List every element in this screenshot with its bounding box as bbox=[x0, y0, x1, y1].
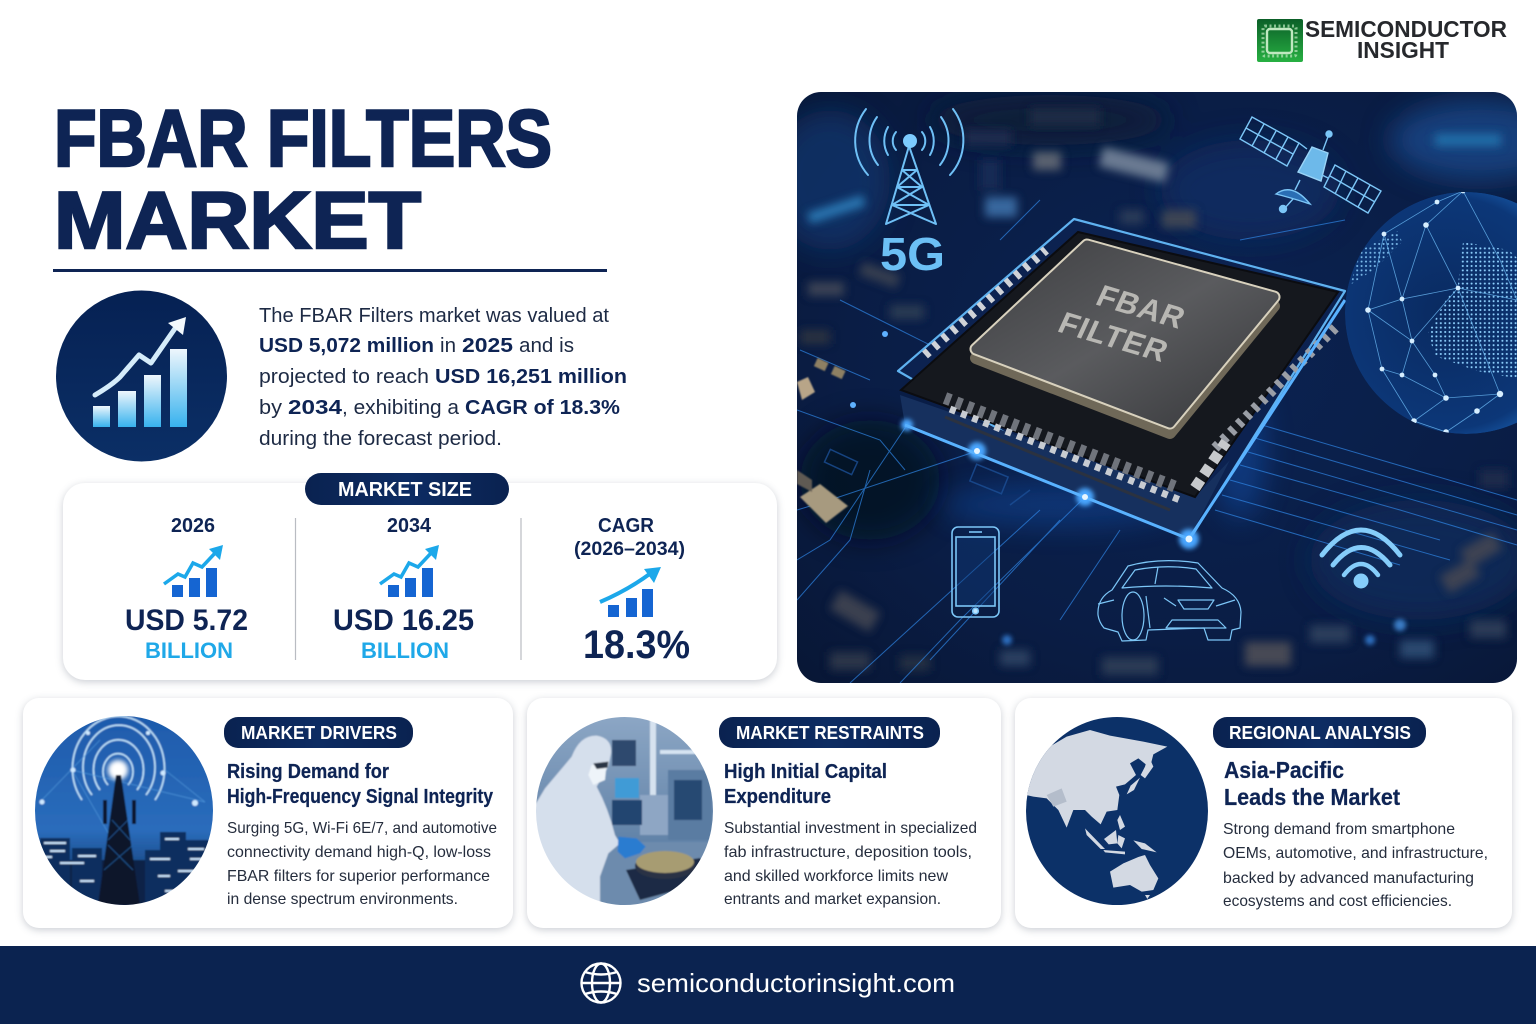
market summary paragraph: by bbox=[259, 397, 282, 419]
5G label: 5G bbox=[880, 228, 945, 280]
heading: Asia-Pacific bbox=[1224, 757, 1344, 783]
website: semiconductorinsight.com bbox=[637, 968, 955, 998]
stat: CAGR: (2026–2034) bbox=[574, 539, 685, 560]
market summary paragraph: USD 5,072 million bbox=[259, 335, 434, 357]
chip package bbox=[898, 219, 1345, 539]
stat: CAGR: 18.3% bbox=[583, 623, 690, 667]
description: backed by advanced manufacturing bbox=[1223, 870, 1474, 887]
glow: circuit board bbox=[797, 200, 1517, 683]
heading bbox=[1224, 757, 1400, 810]
title: FBAR FILTERS bbox=[54, 94, 552, 184]
market summary paragraph: 2025 bbox=[462, 335, 513, 357]
market summary paragraph: in bbox=[440, 335, 456, 357]
market summary paragraph: , exhibiting a bbox=[342, 397, 460, 419]
label pill: MARKET DRIVERS bbox=[241, 723, 397, 743]
description bbox=[227, 820, 497, 908]
label pill bbox=[719, 717, 940, 748]
description: FBAR filters for superior performance bbox=[227, 868, 490, 885]
description: Surging 5G, Wi-Fi 6E/7, and automotive bbox=[227, 820, 497, 837]
icon: globe network bbox=[1345, 192, 1517, 434]
panel: regional analysis bbox=[1015, 698, 1512, 928]
logo wordmark: SEMICONDUCTOR bbox=[1305, 16, 1507, 42]
stat: CAGR bbox=[574, 515, 690, 667]
map: Asia-Pacific globe bbox=[1026, 717, 1208, 905]
market summary paragraph bbox=[259, 305, 627, 450]
logo wordmark: INSIGHT bbox=[1357, 37, 1449, 63]
stat: 2034 bbox=[333, 515, 474, 663]
description: and skilled workforce limits new bbox=[724, 868, 948, 885]
title: MARKET bbox=[54, 176, 421, 266]
market summary paragraph: The FBAR Filters market was valued at bbox=[259, 305, 609, 327]
heading: High-Frequency Signal Integrity bbox=[227, 786, 494, 808]
panel: market drivers bbox=[23, 698, 513, 928]
label pill bbox=[1213, 717, 1426, 748]
icon: web globe bbox=[582, 964, 620, 1002]
description: ecosystems and cost efficiencies. bbox=[1223, 893, 1452, 910]
icon: car outline bbox=[1098, 561, 1241, 641]
icon: phone bbox=[952, 527, 999, 617]
description: OEMs, automotive, and infrastructure, bbox=[1223, 845, 1488, 862]
market summary paragraph: during the forecast period. bbox=[259, 428, 502, 450]
market size pill: MARKET SIZE bbox=[338, 479, 472, 501]
panel: hero chip illustration bbox=[770, 92, 1536, 683]
chip label bbox=[1058, 285, 1184, 362]
description: Strong demand from smartphone bbox=[1223, 821, 1455, 838]
heading: Rising Demand for bbox=[227, 761, 389, 783]
market summary paragraph: and is bbox=[519, 335, 574, 357]
icon: 5G tower bbox=[855, 109, 963, 280]
stat: 2034: BILLION bbox=[361, 638, 449, 663]
logo: Semiconductor Insight bbox=[1257, 16, 1507, 63]
chip lid with label bbox=[976, 245, 1274, 433]
market summary paragraph: 2034 bbox=[288, 397, 343, 419]
heading bbox=[724, 761, 887, 808]
stat: 2026: BILLION bbox=[145, 638, 233, 663]
icon: satellite bbox=[1240, 117, 1381, 213]
description bbox=[724, 820, 977, 908]
market summary paragraph: projected to reach bbox=[259, 366, 429, 388]
heading: Leads the Market bbox=[1224, 784, 1400, 810]
image: 5G tower over city bbox=[35, 716, 213, 905]
market summary paragraph: USD 16,251 million bbox=[435, 366, 627, 388]
panel: market size bbox=[63, 473, 777, 680]
title underline bbox=[53, 269, 607, 272]
icon: wifi bbox=[1322, 530, 1400, 588]
stat: CAGR: CAGR bbox=[598, 515, 655, 537]
description: fab infrastructure, deposition tools, bbox=[724, 844, 972, 861]
heading: High Initial Capital bbox=[724, 761, 887, 783]
component: gold capacitors bbox=[797, 358, 848, 523]
description: Substantial investment in specialized bbox=[724, 820, 977, 837]
chip label: FBAR bbox=[1091, 278, 1191, 336]
icon: green chip bbox=[1257, 19, 1303, 62]
heading bbox=[227, 761, 494, 808]
label pill: REGIONAL ANALYSIS bbox=[1229, 723, 1411, 743]
description: entrants and market expansion. bbox=[724, 891, 941, 908]
description: connectivity demand high-Q, low-loss bbox=[227, 844, 491, 861]
glow nodes bbox=[850, 300, 1406, 645]
stat: 2026: 2026 bbox=[171, 515, 215, 537]
title bbox=[54, 94, 552, 266]
label pill: MARKET RESTRAINTS bbox=[736, 723, 924, 743]
description bbox=[1223, 821, 1488, 910]
market summary paragraph: CAGR of 18.3% bbox=[465, 397, 620, 419]
description: in dense spectrum environments. bbox=[227, 891, 458, 908]
stat: 2026 bbox=[125, 515, 248, 663]
stat: 2026: USD 5.72 bbox=[125, 604, 248, 637]
heading: Expenditure bbox=[724, 786, 831, 808]
panel: market restraints bbox=[527, 698, 1001, 928]
label pill bbox=[224, 717, 413, 748]
stat: 2034: 2034 bbox=[387, 515, 432, 537]
stat: 2034: USD 16.25 bbox=[333, 604, 474, 637]
icon: growth chart circle bbox=[56, 290, 227, 462]
image: cleanroom technician bbox=[536, 717, 713, 905]
footer bar bbox=[0, 946, 1536, 1024]
chip label: FILTER bbox=[1053, 305, 1174, 369]
logo wordmark bbox=[1305, 16, 1507, 63]
market size pill bbox=[305, 473, 509, 505]
